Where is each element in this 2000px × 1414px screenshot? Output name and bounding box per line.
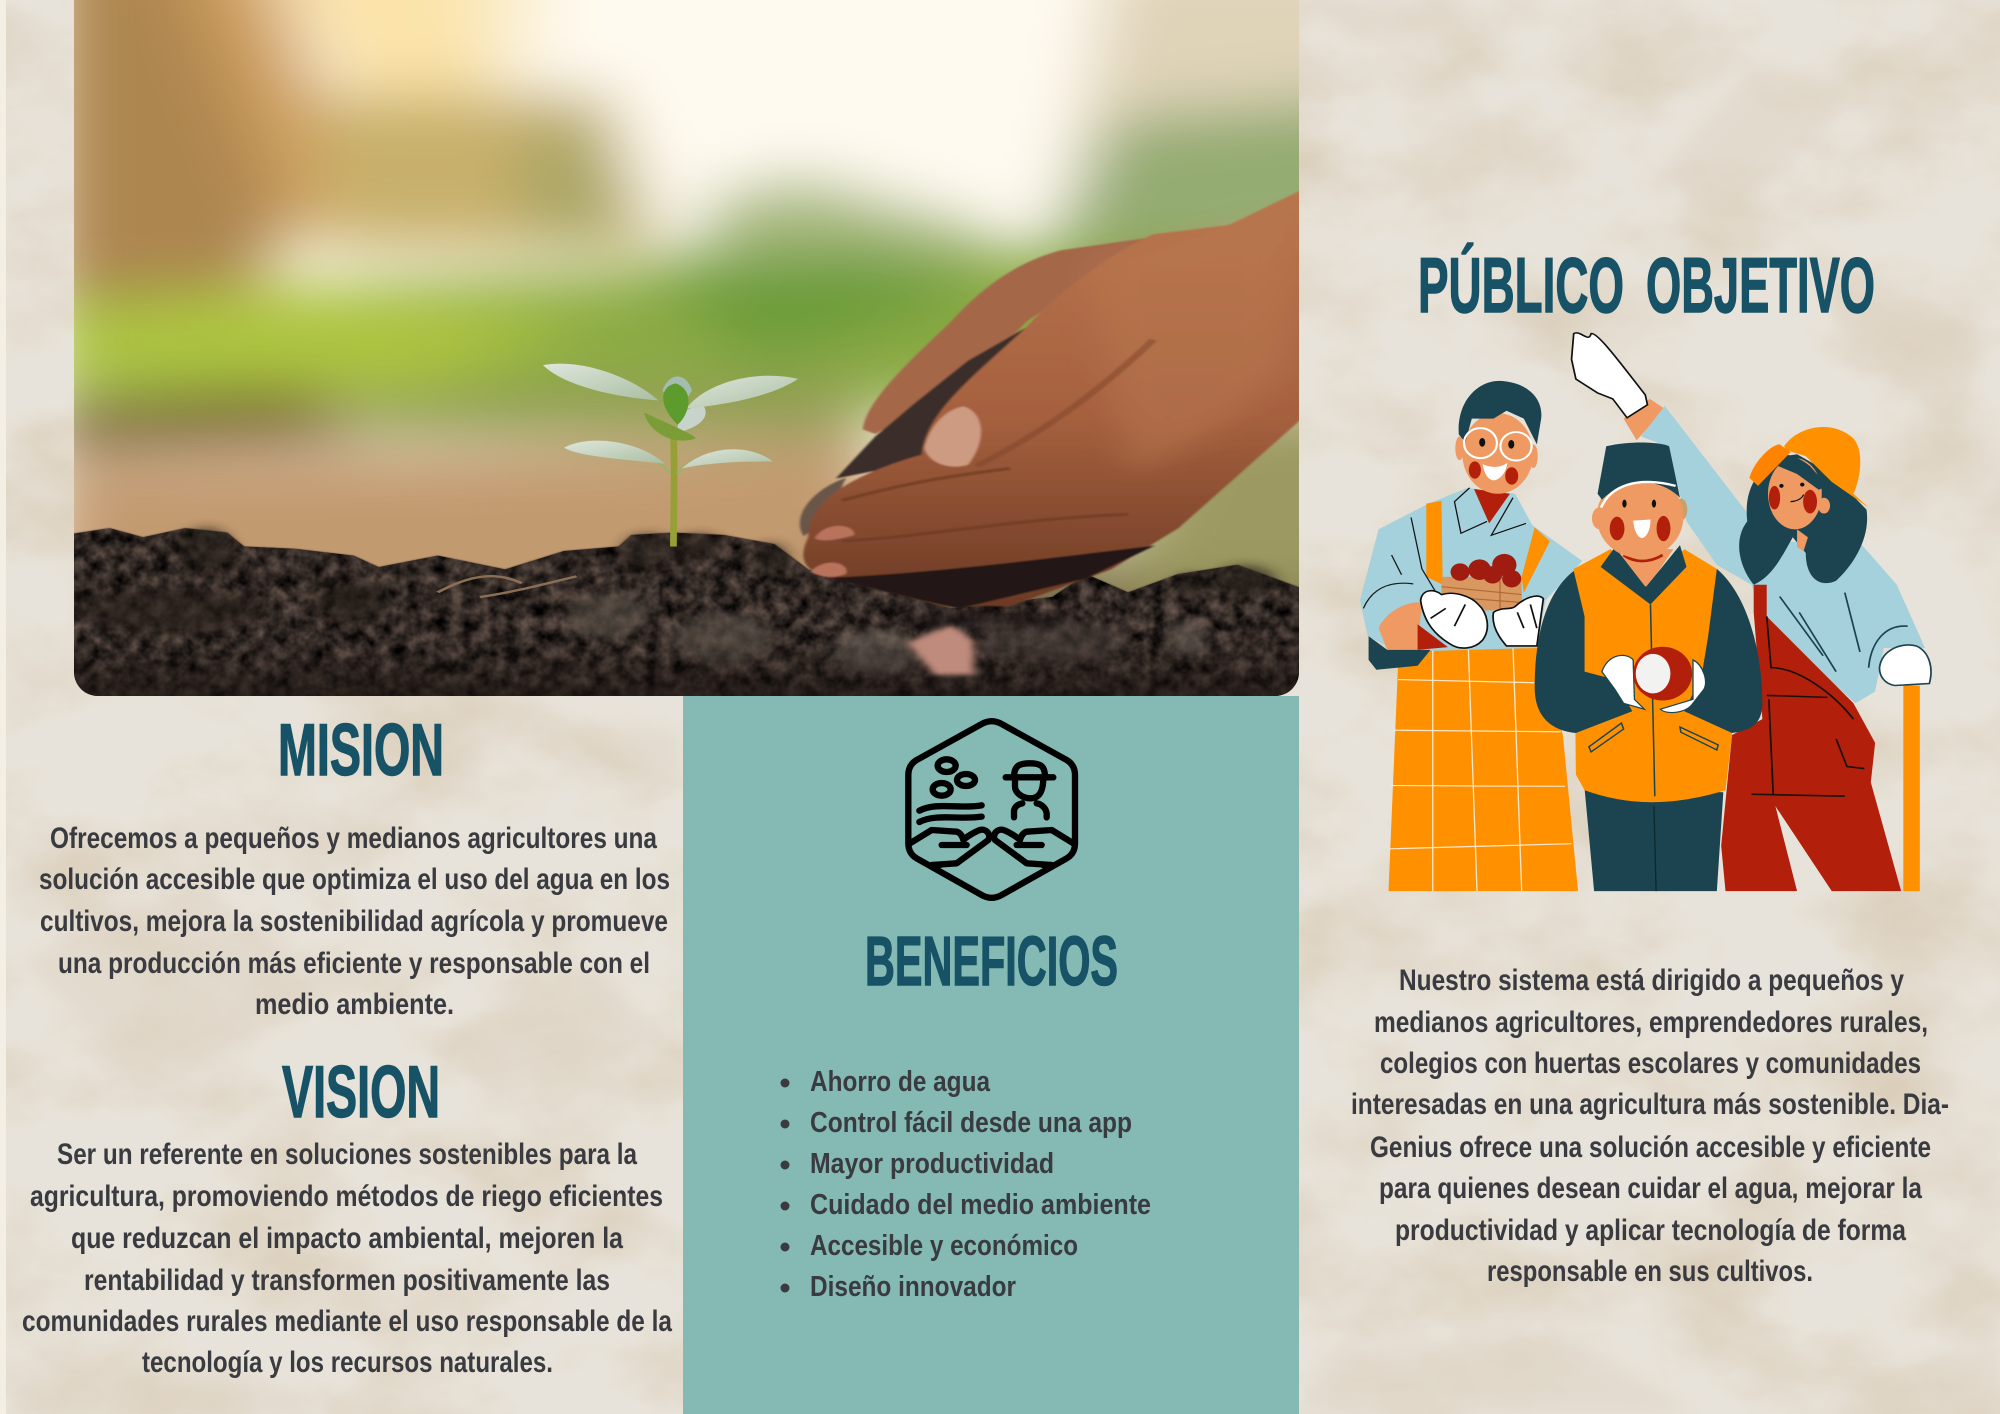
text: vision paragraph [22, 1138, 672, 1379]
text: mision paragraph: medio ambiente. [255, 988, 454, 1021]
text: vision paragraph: agricultura, promoviendo métodos de riego eficientes [30, 1180, 663, 1213]
hands holding soil [800, 188, 1313, 608]
heading: Beneficios: BENEFICIOS [865, 922, 1118, 1000]
list: beneficios [780, 1066, 1151, 1303]
soil [51, 527, 1313, 698]
seedling [543, 364, 798, 546]
text: vision paragraph: comunidades rurales mediante el uso responsable de la [22, 1305, 672, 1338]
list: beneficios: Diseño innovador [810, 1271, 1016, 1303]
text: vision paragraph: tecnología y los recursos naturales. [142, 1346, 553, 1379]
text: mision paragraph [39, 822, 670, 1021]
illustration: three farmers [1360, 333, 1931, 891]
heading: Vision: VISION [282, 1052, 440, 1133]
woman with hard hat [1572, 333, 1931, 891]
text: mision paragraph: una producción más eficiente y responsable con el [58, 947, 650, 980]
man with dragon fruit [1535, 443, 1762, 891]
heading: Publico objetivo: PÚBLICO [1418, 241, 1624, 329]
text: vision paragraph: Ser un referente en soluciones sostenibles para la [57, 1138, 637, 1171]
blurred sunset field background [74, 0, 1299, 684]
text: vision paragraph: que reduzcan el impacto ambiental, mejoren la [71, 1222, 623, 1255]
photo: hands planting a seedling in soil [74, 0, 1299, 696]
text: publico objetivo paragraph: productividad y aplicar tecnología de forma [1395, 1214, 1906, 1247]
text: publico objetivo paragraph [1351, 964, 1949, 1288]
panel: beneficios teal [683, 696, 1299, 1414]
heading: Mision: MISION [278, 710, 444, 791]
list: beneficios: Mayor productividad [810, 1148, 1054, 1180]
list: beneficios: Control fácil desde una app [810, 1107, 1132, 1139]
list: beneficios: Cuidado del medio ambiente [810, 1189, 1151, 1221]
man with crate of tomatoes [1360, 381, 1582, 891]
list: beneficios: Ahorro de agua [810, 1066, 991, 1098]
text: publico objetivo paragraph: responsable en sus cultivos. [1487, 1255, 1813, 1288]
text: mision paragraph: cultivos, mejora la sostenibilidad agrícola y promueve [40, 905, 668, 938]
text: vision paragraph: rentabilidad y transformen positivamente las [84, 1264, 610, 1297]
text: mision paragraph: Ofrecemos a pequeños y medianos agricultores una [50, 822, 657, 855]
icon: farmer and water in hexagon [908, 721, 1075, 898]
list: beneficios: Accesible y económico [810, 1230, 1078, 1262]
text: mision paragraph: solución accesible que optimiza el uso del agua en los [39, 863, 670, 896]
